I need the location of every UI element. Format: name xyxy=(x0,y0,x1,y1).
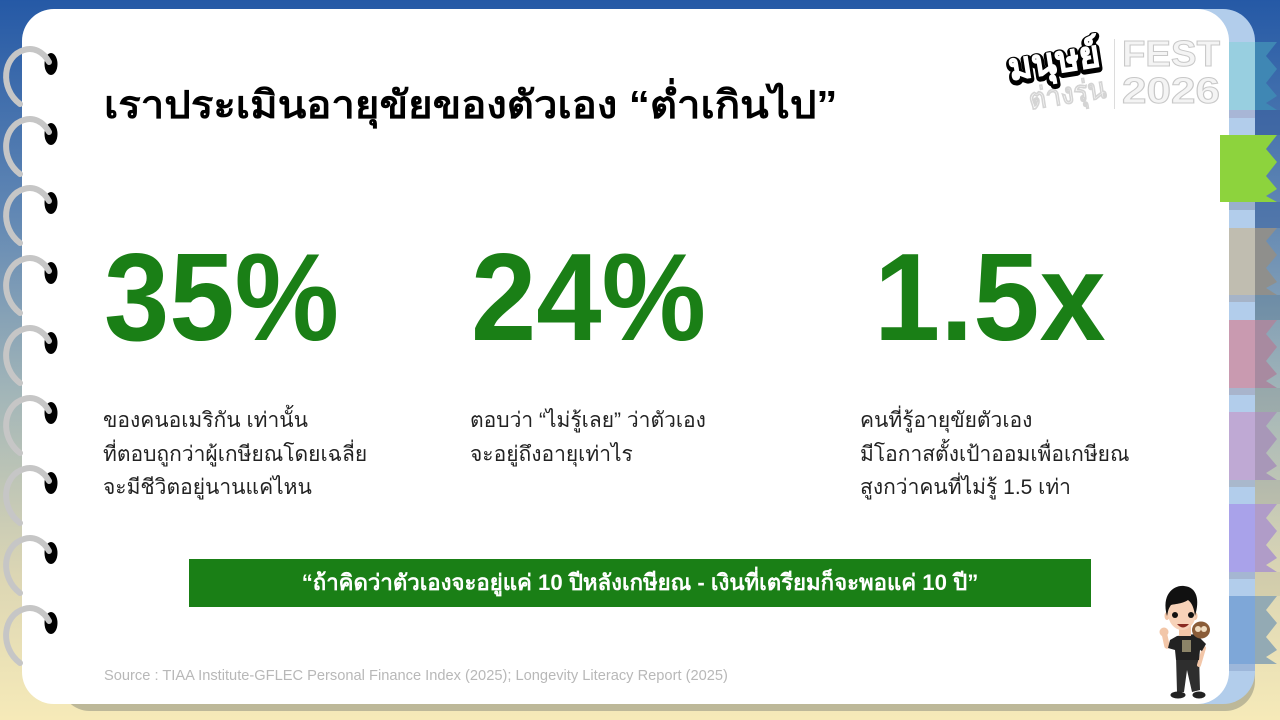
quote banner: “ถ้าคิดว่าตัวเองจะอยู่แค่ 10 ปีหลังเกษียณ - เงินที่เตรียมก็จะพอแค่ 10 ปี” xyxy=(302,570,978,595)
spiral binding rings xyxy=(3,46,58,666)
source: Source : TIAA Institute-GFLEC Personal Finance Index (2025); Longevity Literacy Report (2025) xyxy=(104,668,728,684)
stat: 24%: 24% xyxy=(471,229,706,367)
stat: 1.5x: 1.5x xyxy=(874,229,1106,367)
logo: event brand: มนุษย์ xyxy=(1005,33,1103,91)
logo: event brand: FEST xyxy=(1122,33,1220,74)
description: 1.5x: คนที่รู้อายุขัยตัวเอง xyxy=(860,409,1032,432)
description: 1.5x xyxy=(860,406,1129,500)
stat: 35%: 35% xyxy=(104,229,339,367)
title: เราประเมินอายุขัยของตัวเอง “ต่ำเกินไป” xyxy=(104,84,837,127)
description: 35%: ของคนอเมริกัน เท่านั้น xyxy=(103,409,308,432)
description: 35% xyxy=(103,404,367,500)
description: 35%: ที่ตอบถูกว่าผู้เกษียณโดยเฉลี่ย xyxy=(103,442,367,466)
description: 1.5x: สูงกว่าคนที่ไม่รู้ 1.5 เท่า xyxy=(860,476,1071,499)
description: 24%: ตอบว่า “ไม่รู้เลย” ว่าตัวเอง xyxy=(470,409,706,432)
description: 35%: จะมีชีวิตอยู่นานแค่ไหน xyxy=(103,476,312,499)
description: 24% xyxy=(470,408,706,467)
quote banner xyxy=(189,559,1091,607)
description: 24%: จะอยู่ถึงอายุเท่าไร xyxy=(470,442,633,466)
description: 1.5x: มีโอกาสตั้งเป้าออมเพื่อเกษียณ xyxy=(860,442,1129,466)
logo: event brand xyxy=(1005,32,1220,115)
icon: mascot character xyxy=(1160,586,1210,698)
logo: event brand: 2026 xyxy=(1122,70,1220,111)
logo: event brand: มนุษย์ xyxy=(1006,35,1103,93)
